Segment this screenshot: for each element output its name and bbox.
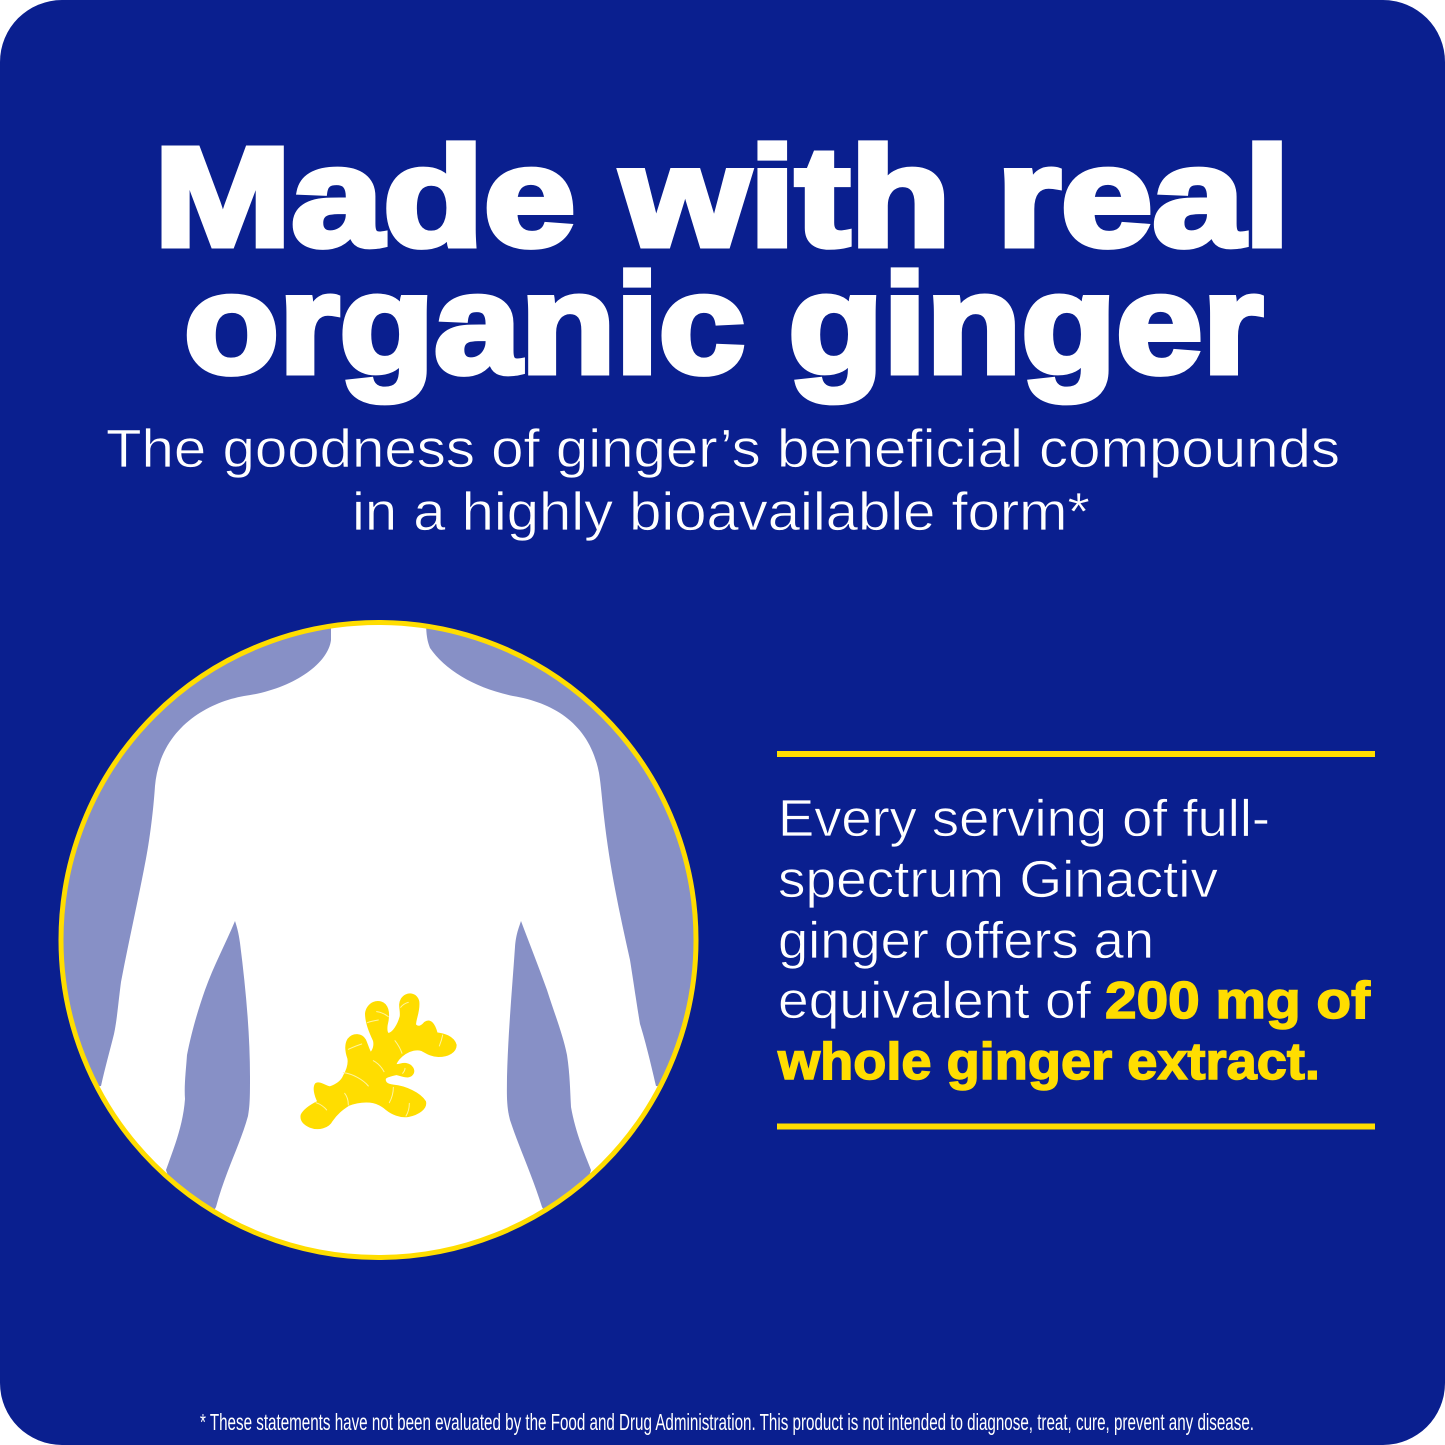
text block: serving claim: ginger offers an bbox=[778, 912, 1154, 970]
text block: serving claim: 200 mg of bbox=[1105, 972, 1371, 1030]
subtitle bbox=[106, 419, 1340, 542]
circle outline bbox=[61, 622, 696, 1258]
title: organic ginger bbox=[184, 244, 1263, 402]
subtitle: The goodness of ginger’s beneficial compounds bbox=[106, 419, 1340, 479]
circle background bbox=[60, 622, 696, 1258]
top rule bbox=[777, 751, 1375, 757]
icon: ginger root bbox=[301, 994, 456, 1128]
subtitle: in a highly bioavailable form* bbox=[352, 482, 1090, 542]
text block: serving claim: spectrum Ginactiv bbox=[778, 851, 1218, 909]
title bbox=[154, 118, 1290, 402]
illustration: body in circle bbox=[60, 615, 700, 1270]
body silhouette bbox=[99, 625, 658, 1255]
text block: serving claim: equivalent of bbox=[778, 972, 1092, 1030]
bottom rule bbox=[777, 1124, 1375, 1130]
title: Made with real bbox=[154, 118, 1290, 276]
text block: serving claim bbox=[777, 790, 1371, 1091]
text block: serving claim: whole ginger extract. bbox=[777, 1033, 1320, 1091]
text block: serving claim: Every serving of full- bbox=[778, 790, 1270, 848]
